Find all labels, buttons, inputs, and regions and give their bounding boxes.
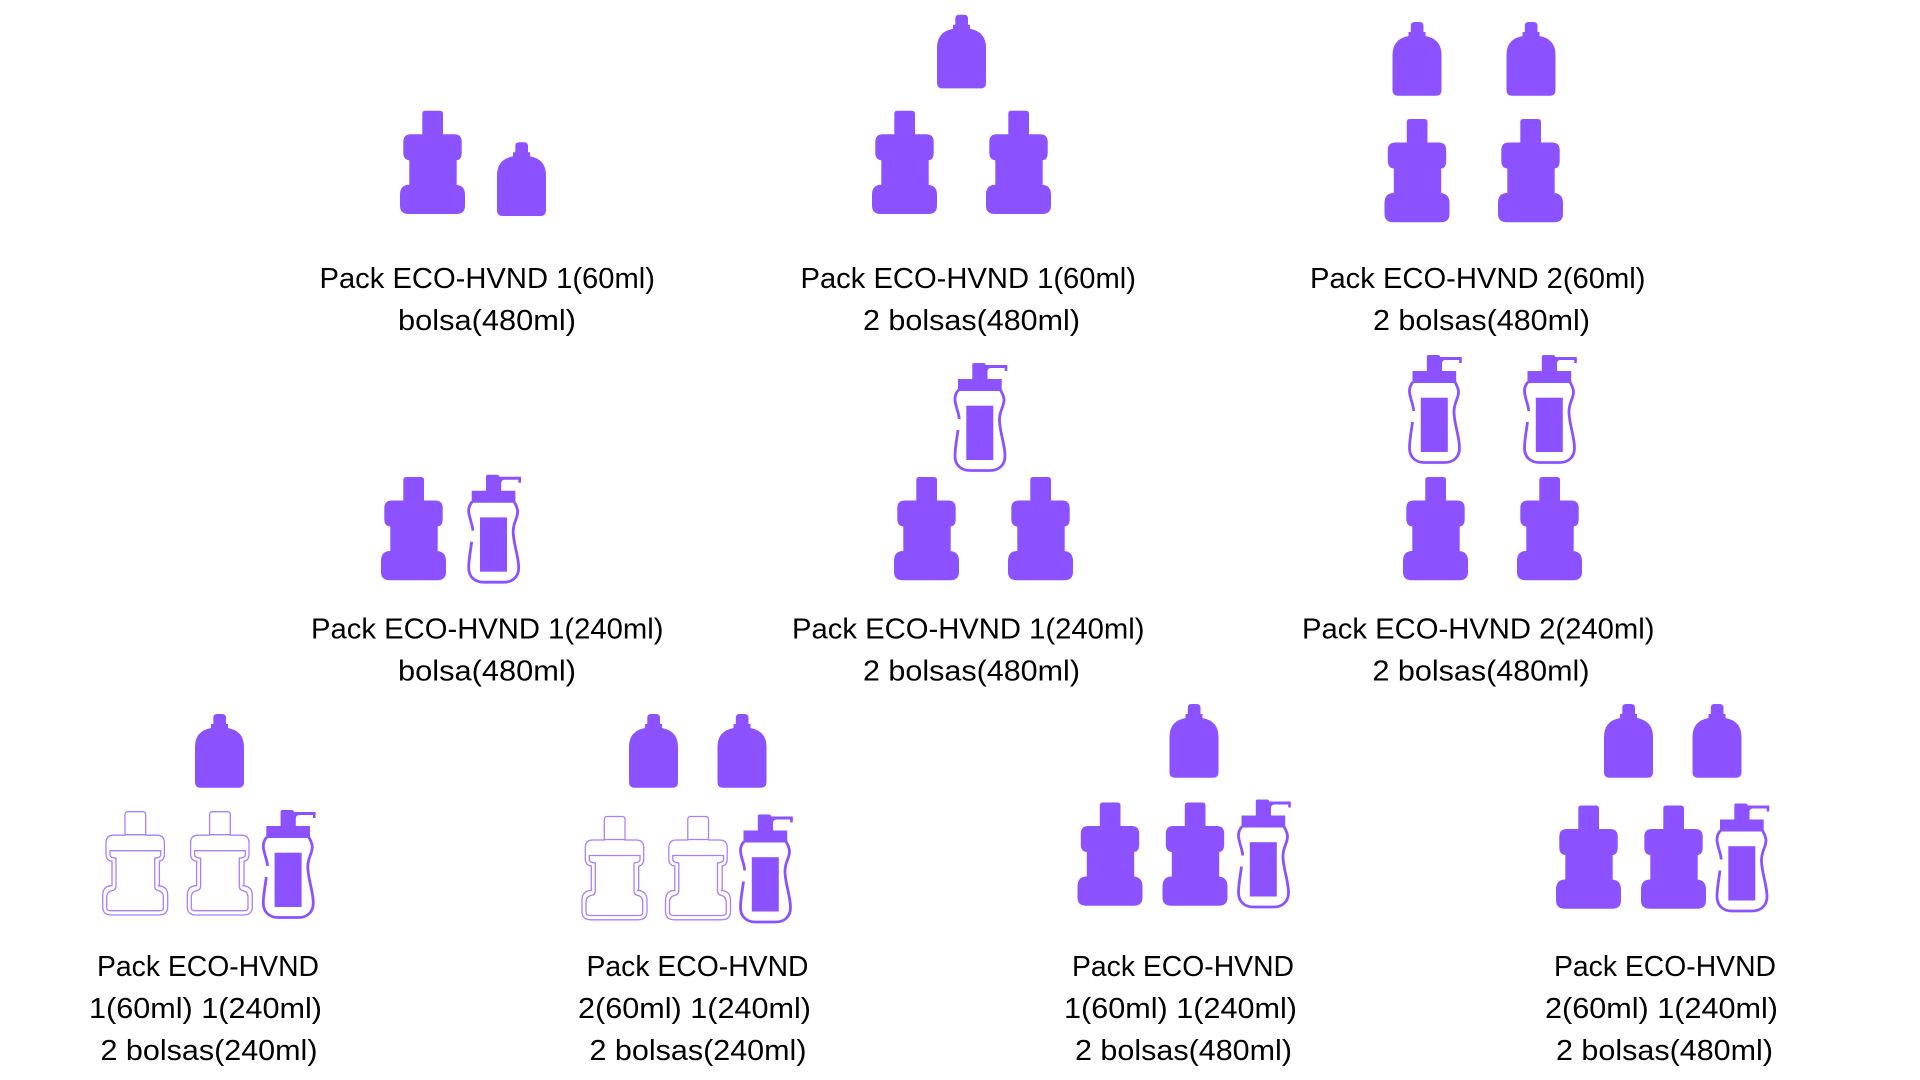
label: pack 9: 2 bolsas(480ml)	[1075, 1035, 1292, 1067]
icon: outline bottle left	[582, 816, 647, 920]
label: pack 7: 2 bolsas(240ml)	[100, 1035, 318, 1067]
icon: small bottle	[497, 142, 546, 216]
icon: pump bottle	[1238, 800, 1291, 907]
label: pack 2: 2 bolsas(480ml)	[863, 305, 1080, 337]
icon: pump bottle	[1717, 804, 1769, 911]
icon: small bottle left	[629, 714, 678, 788]
icon: large bottle right	[1162, 802, 1228, 906]
pack 2: one 60ml bottle and two bags 480ml	[800, 15, 1136, 337]
pack 7: 60ml, 240ml and two bags 240ml	[89, 714, 322, 1067]
label: pack 1	[320, 263, 655, 337]
label: pack 10: Pack ECO-HVND	[1554, 951, 1776, 983]
label: pack 8: 2(60ml) 1(240ml)	[578, 993, 811, 1025]
icon: outline bottle right	[666, 816, 730, 920]
pack 8: two 60ml, 240ml and two bags 240ml	[578, 714, 811, 1067]
icon: large bottle left	[872, 111, 937, 214]
label: pack 5: 2 bolsas(480ml)	[863, 656, 1080, 688]
icon: large bottle	[400, 111, 465, 214]
label: pack 5	[792, 614, 1144, 688]
icon: large bottle left	[1403, 477, 1468, 580]
icon: large bottle right	[1517, 477, 1582, 580]
pack 1: one 60ml bottle and one bag 480ml	[320, 111, 655, 337]
icon: small bottle	[937, 15, 986, 88]
label: pack 9: Pack ECO-HVND	[1072, 951, 1294, 983]
icon: pump bottle	[469, 475, 521, 582]
label: pack 8: Pack ECO-HVND	[586, 951, 808, 983]
label: pack 10: 2 bolsas(480ml)	[1556, 1035, 1773, 1067]
icon: small bottle left	[1604, 704, 1653, 778]
icon: small bottle	[1170, 704, 1218, 778]
label: pack 2	[800, 263, 1136, 337]
label: pack 4: Pack ECO-HVND 1(240ml)	[311, 614, 664, 646]
pack 6: two 240ml bottles and two bags 480ml	[1302, 355, 1654, 688]
icon: large bottle left	[1384, 119, 1450, 222]
icon: small bottle right	[1506, 22, 1556, 96]
icon: small bottle right	[1692, 704, 1742, 778]
pack 5: one 240ml bottle and two bags 480ml	[792, 363, 1144, 688]
label: pack 4: bolsa(480ml)	[398, 656, 576, 688]
pack 10: two 60ml, 240ml and two bags 480ml	[1545, 704, 1778, 1067]
pack 3: two 60ml bottles and two bags 480ml	[1310, 22, 1646, 337]
icon: small bottle right	[718, 714, 766, 788]
icon: small bottle left	[1392, 22, 1442, 96]
label: pack 7: 1(60ml) 1(240ml)	[89, 993, 322, 1025]
label: pack 1: Pack ECO-HVND 1(60ml)	[320, 263, 655, 295]
icon: large bottle right	[986, 111, 1051, 214]
label: pack 3: Pack ECO-HVND 2(60ml)	[1310, 263, 1646, 295]
pack 4: one 240ml bottle and one bag 480ml	[311, 475, 664, 688]
label: pack 5: Pack ECO-HVND 1(240ml)	[792, 614, 1144, 646]
label: pack 8: 2 bolsas(240ml)	[590, 1035, 806, 1067]
label: pack 1: bolsa(480ml)	[398, 305, 576, 337]
label: pack 2: Pack ECO-HVND 1(60ml)	[800, 263, 1136, 295]
label: pack 6: Pack ECO-HVND 2(240ml)	[1302, 614, 1654, 646]
label: pack 6: 2 bolsas(480ml)	[1372, 656, 1590, 688]
label: pack 3	[1310, 263, 1646, 337]
label: pack 8	[578, 951, 811, 1067]
icon: pump bottle	[955, 363, 1007, 470]
label: pack 10	[1545, 951, 1778, 1067]
icon: outline bottle right	[187, 812, 252, 915]
icon: large bottle	[381, 477, 446, 580]
icon: large bottle right	[1008, 477, 1073, 580]
label: pack 9	[1064, 951, 1297, 1067]
icon: large bottle right	[1641, 806, 1706, 909]
icon: pump bottle	[740, 814, 793, 922]
icon: small bottle	[195, 714, 244, 788]
icon: large bottle left	[1078, 802, 1142, 906]
label: pack 9: 1(60ml) 1(240ml)	[1064, 993, 1297, 1025]
label: pack 7: Pack ECO-HVND	[97, 951, 319, 983]
icon: outline bottle left	[103, 812, 168, 915]
icon: pump bottle right	[1524, 355, 1577, 462]
icon: large bottle right	[1498, 119, 1563, 222]
icon: large bottle left	[894, 477, 959, 580]
pack 9: 60ml, 240ml and two bags 480ml	[1064, 704, 1297, 1067]
icon: pump bottle left	[1409, 355, 1462, 462]
label: pack 4	[311, 614, 664, 688]
label: pack 3: 2 bolsas(480ml)	[1373, 305, 1590, 337]
icon: large bottle left	[1556, 806, 1621, 909]
label: pack 7	[89, 951, 322, 1067]
icon: pump bottle	[263, 810, 316, 918]
label: pack 6	[1302, 614, 1654, 688]
label: pack 10: 2(60ml) 1(240ml)	[1545, 993, 1778, 1025]
